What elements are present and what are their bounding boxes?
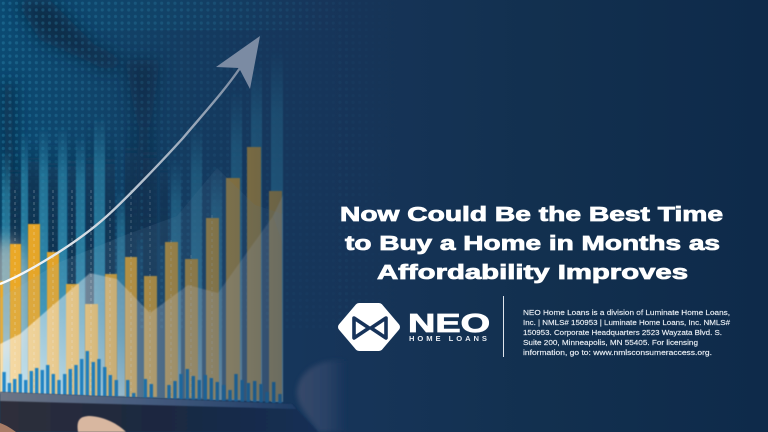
chart: translucent area (far) <box>0 168 283 344</box>
disclaimer text <box>523 308 731 357</box>
chart: translucent area (near) <box>0 195 283 402</box>
chart: small blue bars <box>2 351 282 405</box>
disclaimer text: 150953. Corporate Headquarters 2523 Wayzata Blvd. S. <box>523 328 722 337</box>
disclaimer text: information, go to: www.nmlsconsumeraccess.org. <box>523 348 712 357</box>
dark silhouette behind chart <box>2 0 160 240</box>
disclaimer text: NEO Home Loans is a division of Luminate Home Loans, <box>523 308 730 317</box>
logo <box>342 307 490 347</box>
left finger <box>0 423 16 432</box>
logo bowtie mark <box>354 318 386 338</box>
disclaimer text: Inc. | NMLS# 150953 | Luminate Home Loans, Inc. NMLS# <box>523 318 731 327</box>
logo hexagon <box>342 307 396 347</box>
arrow head <box>216 36 260 89</box>
chart: dashed column guides <box>15 190 212 399</box>
left thumb <box>78 416 126 432</box>
divider <box>503 296 504 357</box>
left hand glow <box>0 238 32 362</box>
tablet bezel highlight <box>0 392 296 409</box>
headline: Affordability Improves <box>377 261 688 284</box>
logo wordmark: NEO <box>408 308 490 338</box>
headline: to Buy a Home in Months as <box>345 232 720 255</box>
chart: dark columns behind bars <box>10 120 168 305</box>
growth arrow <box>0 36 260 284</box>
logo subtitle: HOME LOANS <box>409 334 487 343</box>
right thumb <box>297 361 345 432</box>
navy fade over chart <box>0 30 335 410</box>
tablet body <box>0 392 318 432</box>
headline: Now Could Be the Best Time <box>340 203 723 226</box>
dot-matrix pattern <box>2 2 314 328</box>
arrow shaft <box>0 68 240 284</box>
tablet <box>0 392 318 432</box>
chart: orange bars <box>0 147 282 401</box>
headline <box>340 203 723 284</box>
disclaimer text: Suite 200, Minneapolis, MN 55405. For licensing <box>523 338 698 347</box>
chart: teal background bars <box>2 50 283 402</box>
